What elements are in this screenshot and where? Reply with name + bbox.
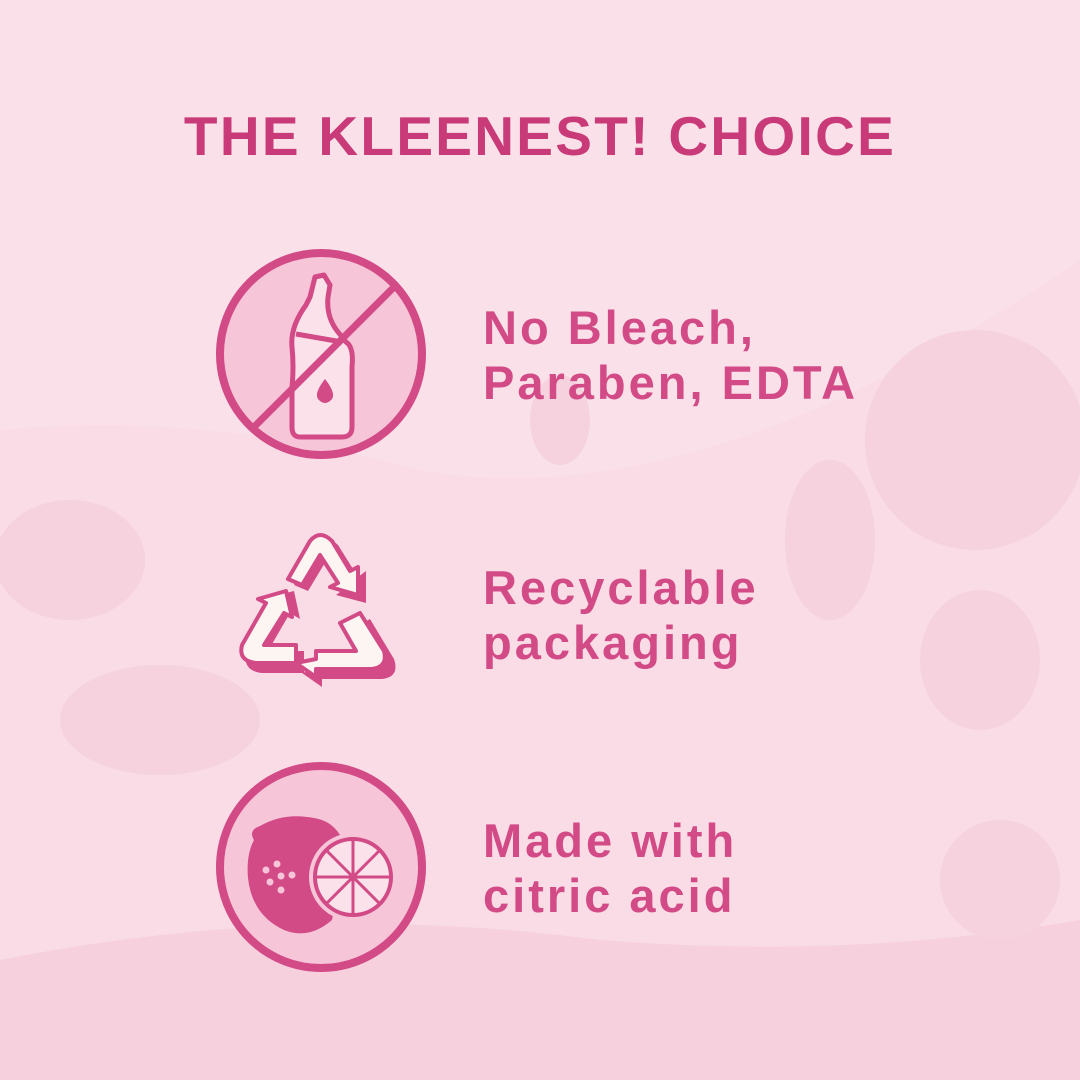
text: recyclable: Recyclable bbox=[483, 561, 759, 614]
icon: citrus bbox=[216, 762, 426, 972]
text: no bleach bbox=[483, 301, 858, 409]
text: recyclable bbox=[483, 561, 759, 669]
text: recyclable: packaging bbox=[483, 616, 742, 669]
text: no bleach: No Bleach, bbox=[483, 301, 756, 354]
text: citric acid bbox=[483, 814, 737, 922]
title: THE KLEENEST! CHOICE bbox=[184, 105, 896, 167]
text: citric acid: citric acid bbox=[483, 869, 735, 922]
text: no bleach: Paraben, EDTA bbox=[483, 356, 858, 409]
icon: no bleach bottle bbox=[216, 249, 426, 459]
text: citric acid: Made with bbox=[483, 814, 737, 867]
icon: recycle bbox=[239, 533, 396, 687]
